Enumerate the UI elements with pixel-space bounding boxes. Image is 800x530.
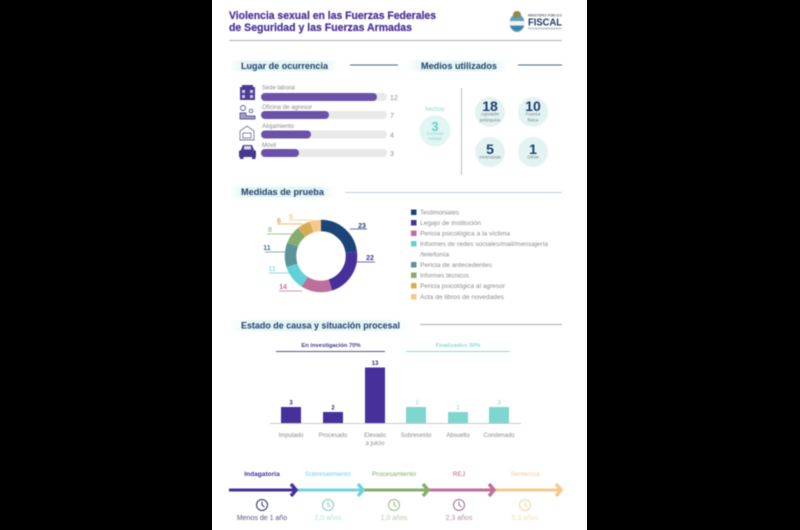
- bar: Alojamiento: [261, 124, 394, 140]
- group label: En investigación 70%: [276, 343, 385, 352]
- bar chart: lugar de ocurrencia: [261, 86, 398, 158]
- group label: Finalizados 30%: [406, 343, 510, 352]
- bar chart: situación procesal: 3: [497, 400, 501, 406]
- donut chart: medidas de prueba: 11: [268, 266, 276, 273]
- bar chart: situación procesal: Elevado: [364, 433, 387, 439]
- heading: Lugar de ocurrencia: Lugar de ocurrencia: [241, 61, 329, 72]
- stat: 1 otros: Otros: [527, 154, 539, 160]
- stat: 5 amenazas: [475, 137, 505, 167]
- stat: 18 agresión jerárquica: 18: [482, 98, 498, 114]
- donut chart: medidas de prueba: [263, 214, 375, 291]
- bar: Sede laboral: 12: [390, 95, 398, 102]
- timeline: Sentencia: Sentencia: [510, 471, 540, 478]
- stat: hechos: hechos: [425, 107, 445, 113]
- stat: 10 fuerza física: Fuerza: [526, 112, 541, 116]
- timeline: Indagatoria: [229, 471, 296, 522]
- bar: Sede laboral: [261, 86, 398, 102]
- bar: Alojamiento: 4: [390, 132, 394, 140]
- title: Violencia sexual en las Fuerzas Federales: [229, 10, 436, 22]
- timeline: Sobreseimiento: [297, 471, 363, 522]
- bar chart: situación procesal: 2: [456, 406, 460, 412]
- timeline: Indagatoria: Menos de 1 año: [237, 515, 287, 522]
- white page panel: [212, 0, 587, 530]
- legend: medidas de prueba: [411, 210, 549, 301]
- group label: En investigación 70%: En investigación 70%: [301, 343, 361, 349]
- legend: medidas de prueba: Legajo de institución: [420, 221, 481, 227]
- bar chart: situación procesal: 13: [372, 361, 379, 367]
- stat: 10 fuerza física: [518, 97, 548, 127]
- bar: Oficina del agresor: Oficina de agresor: [262, 105, 312, 111]
- timeline: Indagatoria: Indagatoria: [244, 471, 280, 478]
- timeline: REJ: [428, 471, 494, 522]
- donut chart: medidas de prueba: 14: [279, 284, 287, 291]
- stat: 18 agresión jerárquica: Agresión: [481, 112, 500, 116]
- timeline: Procesamiento: 1,0 años: [381, 515, 408, 522]
- bar chart: situación procesal: Imputado: [278, 433, 304, 439]
- bar chart: situación procesal: 3: [289, 400, 293, 406]
- stat: hechos: [420, 107, 450, 146]
- stat: 10 fuerza física: física: [528, 118, 539, 122]
- donut chart: medidas de prueba: 5: [289, 214, 293, 221]
- stat: 10 fuerza física: 10: [525, 98, 541, 114]
- group label: Finalizados 30%: Finalizados 30%: [436, 343, 480, 349]
- legend: medidas de prueba: /telefonía: [420, 252, 450, 258]
- icon: vehicle: [239, 145, 256, 159]
- stat: 1 otros: 1: [529, 141, 537, 157]
- heading: Medidas de prueba: Medidas de prueba: [241, 187, 325, 198]
- donut chart: medidas de prueba: 11: [263, 245, 271, 252]
- donut chart: medidas de prueba: 8: [268, 227, 272, 234]
- bar chart: situación procesal: 3: [415, 400, 419, 406]
- timeline: Procesamiento: Procesamiento: [372, 471, 416, 478]
- stat: hechos: mixtas: [428, 136, 442, 141]
- timeline: REJ: REJ: [453, 471, 465, 478]
- legend: medidas de prueba: Pericia de antecedentes: [420, 263, 492, 269]
- timeline: REJ: 2,3 años: [446, 515, 473, 522]
- icon: lodging: [240, 126, 254, 140]
- bar: Oficina del agresor: 7: [390, 113, 394, 120]
- bar chart: situación procesal: Condenado: [483, 433, 515, 439]
- stat: hechos: Fuerzas: [427, 131, 444, 136]
- title: [229, 10, 436, 34]
- bar chart: situación procesal: Procesado: [319, 433, 348, 439]
- logo: Ministerio Público Fiscal: [510, 11, 563, 32]
- legend: medidas de prueba: Pericia psicológica a la víctima: [420, 232, 511, 238]
- heading: Medios utilizados: Medios utilizados: [421, 61, 497, 72]
- bar chart: situación procesal: Sobreseído: [401, 433, 432, 439]
- logo: Ministerio Público Fiscal: FISCAL: [528, 18, 562, 28]
- bar: Alojamiento: Alojamiento: [262, 124, 295, 130]
- timeline: Sentencia: 5,3 años: [512, 515, 539, 522]
- bar: Móvil: Móvil: [262, 143, 276, 149]
- stat: 5 amenazas: Amenazas: [479, 154, 502, 160]
- timeline: Sentencia: [494, 471, 561, 522]
- legend: medidas de prueba: Informes de redes sociales/mail/mensajería: [420, 242, 549, 248]
- bar: Móvil: 3: [390, 151, 394, 158]
- timeline: Procesamiento: [363, 471, 428, 522]
- heading: Estado de causa y situación procesal: Estado de causa y situación procesal: [241, 320, 400, 332]
- timeline: Sobreseimiento: Sobreseimiento: [305, 471, 351, 478]
- legend: medidas de prueba: Testimoniales: [420, 210, 459, 216]
- legend: medidas de prueba: Informes técnicos: [420, 274, 469, 280]
- donut chart: medidas de prueba: 23: [358, 223, 366, 230]
- bar chart: situación procesal: Absuelto: [446, 433, 470, 439]
- title: de Seguridad y las Fuerzas Armadas: [229, 22, 412, 34]
- legend: medidas de prueba: Pericia psicológica al agresor: [420, 284, 505, 290]
- stat: hechos: 3: [431, 119, 439, 134]
- bar chart: situación procesal: 2: [331, 406, 335, 412]
- bar: Móvil: [261, 143, 394, 158]
- stat: 18 agresión jerárquica: [475, 97, 505, 127]
- logo: Ministerio Público Fiscal: MINISTERIO PÚBLICO: [528, 12, 563, 18]
- legend: medidas de prueba: Acta de libros de novedades: [420, 295, 504, 301]
- icon: aggressor's office: [240, 106, 255, 119]
- bar: Sede laboral: Sede laboral: [262, 86, 295, 92]
- bar chart: situación procesal: a juicio: [366, 441, 385, 447]
- stat: 1 otros: [518, 137, 548, 167]
- logo: Ministerio Público Fiscal: PROCURACIÓN GENERAL DE LA NACIÓN: [528, 26, 562, 30]
- bar: Oficina del agresor: [261, 105, 394, 120]
- stat: 18 agresión jerárquica: jerárquica: [479, 118, 501, 122]
- bar chart: situación procesal: [270, 361, 521, 447]
- donut chart: medidas de prueba: 22: [366, 255, 374, 262]
- icon: building: [240, 85, 255, 100]
- donut chart: medidas de prueba: 6: [277, 218, 281, 225]
- stat: 5 amenazas: 5: [486, 141, 494, 157]
- timeline: Sobreseimiento: 2,0 años: [315, 515, 342, 522]
